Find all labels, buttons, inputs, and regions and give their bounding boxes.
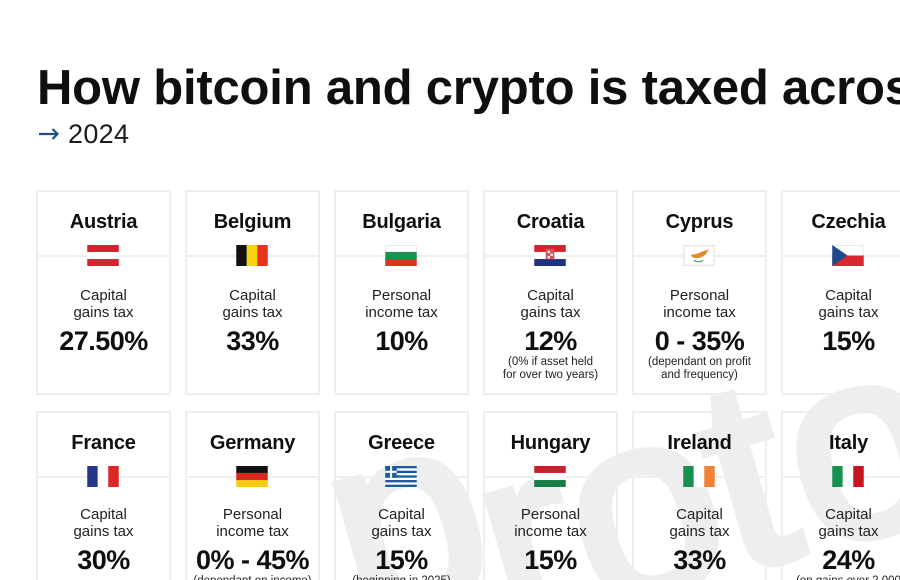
tax type: Capital [527,287,574,304]
tax type: gains tax [818,304,879,321]
tax type: Personal [670,287,729,304]
tax rate: 30% [77,545,130,575]
panel: Greece [334,411,469,580]
tax type: income tax [663,304,736,321]
tax type [222,287,283,321]
tax type [818,506,879,540]
icon: flag of Italy [832,466,864,487]
tax type [514,506,587,540]
tax rate: 33% [226,326,279,356]
icon: flag of Belgium [236,245,268,266]
tax type [818,287,879,321]
country name: France [71,432,136,454]
panel: Belgium [185,190,320,395]
tax type: Personal [223,506,282,523]
tax rate: 15% [524,545,577,575]
panel: France [36,411,171,580]
tax rate: 12% [524,326,577,356]
panel: Ireland [632,411,767,580]
country name: Germany [210,432,295,454]
tax type: Capital [80,287,127,304]
panel: Hungary [483,411,618,580]
tax rate: 24% [822,545,875,575]
tax type: Capital [229,287,276,304]
tax type [73,287,134,321]
footnote: (0% if asset held [508,356,593,368]
tax rate: 27.50% [59,326,148,356]
tax type: gains tax [669,523,730,540]
footnote: (dependant on profit [648,356,751,368]
tax type: Capital [825,287,872,304]
footnote [503,356,598,380]
tax rate: 15% [375,545,428,575]
tax rate: 0% - 45% [196,545,309,575]
icon: flag of Austria [87,245,119,266]
tax type [73,506,134,540]
tax type: gains tax [371,523,432,540]
icon: flag of Germany [236,466,268,487]
footnote: and frequency) [661,368,738,380]
panel: Czechia [781,190,900,395]
tax type [216,506,289,540]
panel: Bulgaria [334,190,469,395]
tax type: gains tax [73,304,134,321]
country name: Croatia [517,211,584,233]
tax type: income tax [365,304,438,321]
tax type: gains tax [520,304,581,321]
tax type: gains tax [818,523,879,540]
tax type: Capital [825,506,872,523]
icon: flag of Croatia [534,245,566,266]
country name: Greece [368,432,435,454]
country name: Austria [70,211,137,233]
tax rate: 33% [673,545,726,575]
tax type [365,287,438,321]
footnote [648,356,751,380]
tax type: income tax [216,523,289,540]
tax type: gains tax [222,304,283,321]
icon: flag of Bulgaria [385,245,417,266]
panel: Austria [36,190,171,395]
tax type: Capital [80,506,127,523]
subtitle: year with arrow [39,119,129,149]
country name: Bulgaria [362,211,441,233]
icon: flag of France [87,466,119,487]
country name: Italy [829,432,868,454]
tax type [371,506,432,540]
tax rate: 0 - 35% [655,326,744,356]
tax type: Personal [521,506,580,523]
tax type [663,287,736,321]
tax type: Capital [378,506,425,523]
icon: flag of Hungary [534,466,566,487]
icon: arrow [39,128,59,140]
country name: Belgium [214,211,291,233]
footnote: for over two years) [503,368,598,380]
panel: Croatia [483,190,618,395]
country name: Hungary [511,432,590,454]
tax type: gains tax [73,523,134,540]
tax type: Personal [372,287,431,304]
panel: Germany [185,411,320,580]
icon: flag of Czechia [832,245,864,266]
icon: flag of Greece [385,466,417,487]
country name: Ireland [667,432,732,454]
tax rate: 15% [822,326,875,356]
country name: Czechia [811,211,886,233]
tax type: income tax [514,523,587,540]
country name: Cyprus [666,211,733,233]
panel: Cyprus [632,190,767,395]
panel: Italy [781,411,900,580]
icon: flag of Cyprus [683,245,715,266]
icon: flag of Ireland [683,466,715,487]
tax type: Capital [676,506,723,523]
tax type [669,506,730,540]
tax rate: 10% [375,326,428,356]
tax type [520,287,581,321]
year: 2024 [68,119,129,149]
